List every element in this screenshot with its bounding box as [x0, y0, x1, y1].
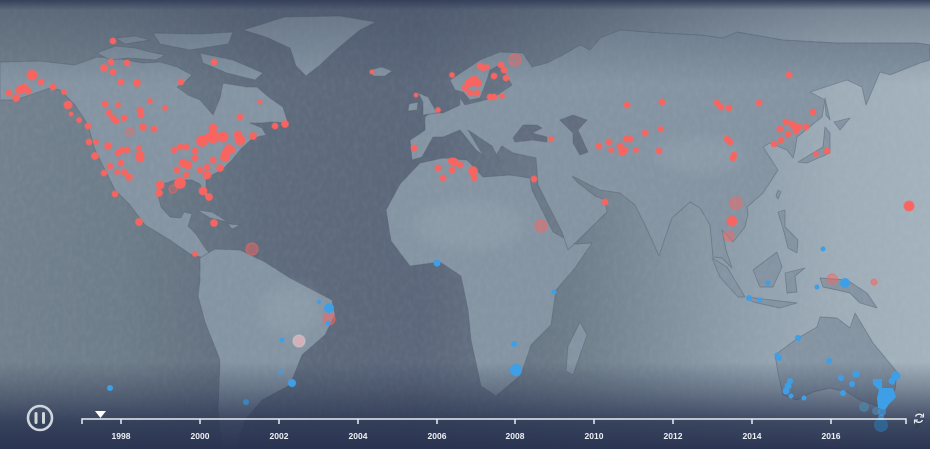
markers: North America: [6, 38, 288, 256]
arctic shading: [0, 0, 930, 85]
timeline position marker: [95, 411, 106, 418]
landmass: Great Britain: [418, 93, 437, 115]
landmass: Taiwan: [776, 190, 781, 199]
landmass: Tasmania: [877, 423, 887, 432]
landmass: Greenland: [243, 16, 376, 76]
landmass: New Zealand: [916, 410, 925, 428]
year labels: 2010: [585, 431, 604, 441]
year labels: 2004: [349, 431, 368, 441]
landmass: Cuba and Caribbean: [197, 210, 240, 229]
year labels: 2002: [270, 431, 289, 441]
landmass: Japan: [798, 98, 850, 163]
timeline axis and ticks: [82, 419, 906, 424]
year labels: 2014: [743, 431, 762, 441]
year labels: 2000: [191, 431, 210, 441]
markers: Australia: [774, 335, 900, 432]
timeline: [82, 411, 906, 441]
year labels: 2012: [664, 431, 683, 441]
year labels: 1998: [112, 431, 131, 441]
terrain shading: [260, 137, 745, 335]
pause button: [28, 406, 52, 430]
markers: Southeast Asia: [746, 246, 850, 302]
bottom dark gradient overlay: [0, 362, 930, 449]
landmass: Sumatra: [712, 258, 745, 297]
red event markers: [6, 38, 914, 347]
landmass: Iceland: [370, 67, 392, 76]
landmass: New Guinea: [820, 278, 877, 308]
landmass: South America: [198, 249, 335, 449]
year labels: 2006: [428, 431, 447, 441]
markers: Asia and Pacific: [246, 72, 914, 347]
landmass: Java: [747, 297, 797, 308]
landmass: Eurasia: [410, 30, 930, 268]
landmass: Sulawesi: [785, 268, 805, 293]
landmass: Borneo: [753, 252, 782, 287]
landmass: Australia: [775, 313, 897, 407]
year labels: 2016: [822, 431, 841, 441]
markers: Americas and Africa: [107, 260, 556, 405]
landmass: Africa: [386, 158, 592, 396]
markers: Europe, Africa and Middle East: [370, 54, 608, 232]
landmass: North America: [0, 57, 288, 258]
water: Black Sea: [513, 125, 547, 142]
water: Caspian Sea: [560, 115, 588, 155]
blue event markers: [107, 246, 900, 432]
landmass: Madagascar: [566, 322, 587, 375]
landmass: Arctic islands: [97, 32, 233, 60]
year labels: 2008: [506, 431, 525, 441]
year labels: [112, 431, 841, 441]
landmass: Baffin Island: [200, 53, 263, 80]
icon: replay: [914, 414, 924, 424]
top dark gradient overlay: [0, 0, 930, 10]
landmass: Philippines: [778, 210, 798, 253]
landmass: Ireland: [408, 102, 418, 111]
